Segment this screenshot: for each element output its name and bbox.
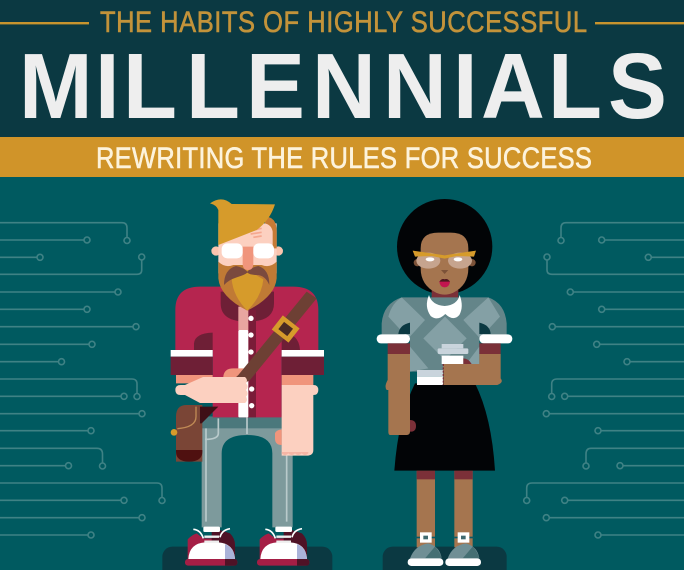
- glasses: [222, 243, 243, 258]
- ground shadow: [162, 547, 332, 570]
- messenger bag: [171, 405, 202, 462]
- sweater: [382, 297, 507, 372]
- jeans: [202, 417, 293, 527]
- quiff: [210, 199, 275, 245]
- illustration: bearded man: [162, 199, 332, 570]
- head: [210, 199, 283, 311]
- ground shadow: [383, 547, 507, 570]
- shoes: [185, 527, 309, 566]
- white collar: [427, 295, 462, 318]
- sweater cuffs: [377, 334, 512, 354]
- legs and anklets: [415, 471, 474, 547]
- nose: [243, 247, 253, 270]
- shoes: [408, 543, 481, 566]
- skirt: [394, 383, 495, 471]
- forearm crossing body: [175, 377, 254, 408]
- hand behind the strap: [176, 368, 245, 383]
- belt: [417, 370, 443, 385]
- arm: viewer right: [275, 375, 318, 456]
- circuit lines: left: [0, 223, 165, 538]
- shoulder strap and buckle: [222, 292, 317, 390]
- shirt: [171, 287, 324, 423]
- lips: [439, 279, 450, 287]
- arms: [386, 354, 502, 435]
- face: [413, 233, 476, 295]
- circuit lines: right: [524, 223, 684, 538]
- neck: [432, 290, 458, 302]
- beard: [218, 262, 277, 311]
- moustache: [224, 266, 269, 285]
- nose: [441, 270, 448, 274]
- subtitle banner: [0, 137, 684, 177]
- coffee cup: [438, 344, 472, 364]
- title: millennials: MILLENNIALS: [19, 35, 667, 139]
- header panel: [0, 0, 684, 139]
- afro hair: [397, 199, 492, 294]
- heading: the habits of highly successful: THE HABITS OF HIGHLY SUCCESSFUL: [100, 5, 587, 38]
- subtitle banner: REWRITING THE RULES FOR SUCCESS: [96, 141, 592, 174]
- illustration: woman with afro: [377, 199, 512, 570]
- glasses: [416, 253, 440, 269]
